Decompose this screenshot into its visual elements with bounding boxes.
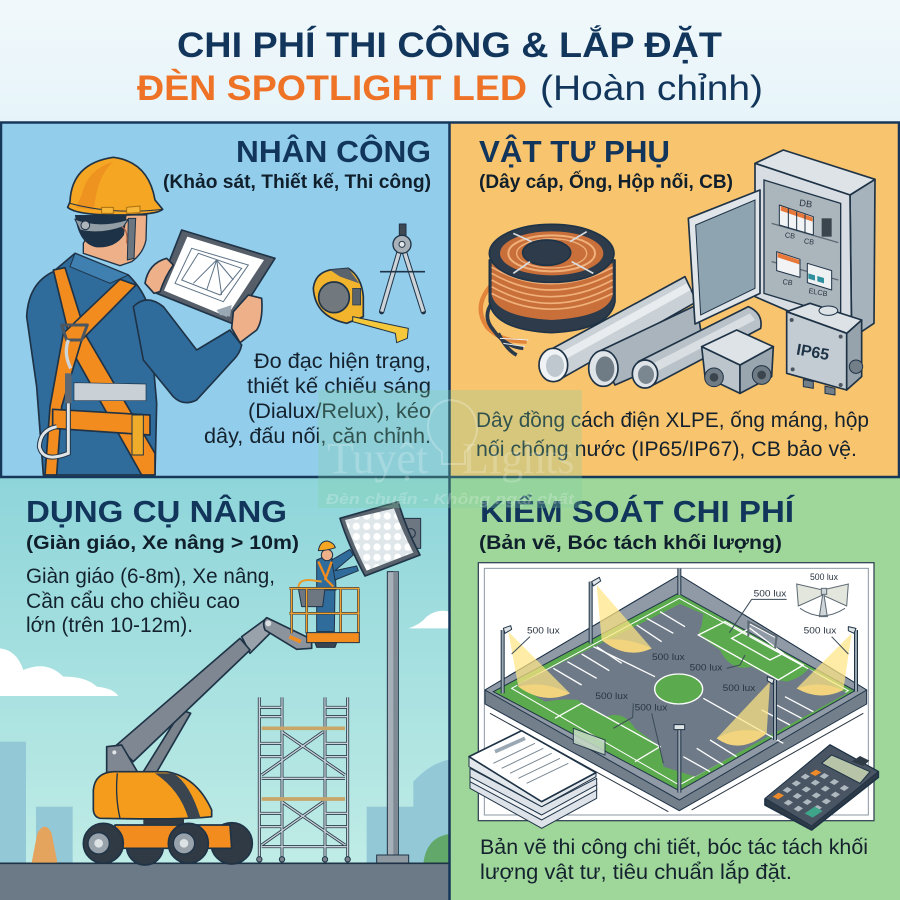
icon: rear pipes [539, 277, 703, 386]
boom lift [83, 618, 312, 865]
text block: kiểm soát chi phí: lượng vật tư, tiêu chuẩn lắp đặt. [480, 861, 792, 884]
icon: distribution board: ELCB [808, 286, 828, 298]
neck and face [83, 215, 147, 266]
text block: nhân công: dây, đấu nối, căn chỉnh. [204, 425, 431, 448]
text block: kiểm soát chi phí [480, 836, 868, 884]
text block: kiểm soát chi phí: Bản vẽ thi công chi tiết, bóc tác tách khối [480, 836, 868, 859]
icon: distribution board: CB [803, 236, 815, 247]
watermark [318, 390, 582, 508]
lux labels: 500 lux [527, 625, 560, 635]
icon: tape measure [313, 268, 363, 323]
heading: kiểm soát chi phí: KIỂM SOÁT CHI PHÍ [480, 494, 795, 529]
illustration: lighting plan [469, 563, 878, 830]
icon: small junction box [702, 330, 773, 393]
lux labels: 500 lux [754, 589, 787, 599]
subheading: dụng cụ nâng: (Giàn giáo, Xe nâng > 10m) [26, 533, 299, 554]
subheading: kiểm soát chi phí: (Bản vẽ, Bóc tách khối lượng) [479, 533, 782, 554]
light poles [503, 568, 856, 793]
heading: vật tư phụ: VẬT TƯ PHỤ [479, 133, 670, 169]
lux labels [527, 572, 838, 713]
title: CHI PHÍ THI CÔNG & LẮP ĐẶT [177, 25, 722, 65]
icon: cone [32, 827, 57, 863]
panel: nhân công [0, 122, 450, 477]
text block: dụng cụ nâng: lớn (trên 10-12m). [26, 614, 193, 637]
watermark: Đèn chuẩn - Không ngại chất [326, 491, 575, 508]
lux labels: 500 lux [810, 572, 838, 582]
panel: dụng cụ nâng [0, 478, 450, 900]
ground [0, 863, 450, 900]
icon: distribution board: CB [784, 230, 796, 241]
illustration: materials [481, 150, 875, 395]
text block: vật tư phụ: Dây đồng cách điện XLPE, ống máng, hộp [476, 409, 869, 432]
lux labels: 500 lux [635, 703, 668, 713]
helmet [68, 157, 163, 215]
title: (Hoàn chỉnh) [540, 69, 763, 108]
icon: front pipe [632, 307, 761, 388]
icon: IP65 box [787, 303, 863, 395]
panel: vật tư phụ [450, 122, 900, 477]
field plan [485, 575, 867, 812]
tablet [157, 230, 275, 324]
subheading: vật tư phụ: (Dây cáp, Ống, Hộp nối, CB) [479, 171, 733, 193]
watermark: Lights [462, 434, 574, 483]
heading: nhân công: NHÂN CÔNG [236, 133, 431, 169]
text block: vật tư phụ: nối chống nước (IP65/IP67), CB bảo vệ. [476, 438, 857, 461]
heading: dụng cụ nâng: DỤNG CỤ NÂNG [26, 493, 287, 529]
subheading: nhân công: (Khảo sát, Thiết kế, Thi công) [163, 172, 431, 193]
panel: kiểm soát chi phí [450, 478, 900, 900]
text block: vật tư phụ [476, 409, 869, 461]
illustration: boom lift and scaffold [0, 502, 450, 900]
text block: nhân công [204, 350, 431, 448]
header band [0, 0, 900, 122]
background: clouds, buildings [0, 611, 450, 863]
light beams [508, 585, 852, 746]
icon: cable reel [481, 224, 615, 355]
beam angle diagram [797, 584, 848, 617]
icon: distribution board: CB [782, 277, 793, 287]
text block: dụng cụ nâng: Cần cẩu cho chiều cao [26, 590, 240, 613]
icon: calculator [765, 745, 878, 830]
text block: dụng cụ nâng [26, 565, 275, 637]
text block: nhân công: (Dialux/Relux), kéo [248, 400, 431, 423]
lamp pole [377, 572, 409, 863]
lux labels: 500 lux [723, 683, 756, 693]
lux labels: 500 lux [804, 625, 837, 635]
title [137, 25, 763, 108]
text block: dụng cụ nâng: Giàn giáo (6-8m), Xe nâng, [26, 565, 275, 588]
text block: nhân công: Đo đạc hiện trạng, [254, 350, 431, 373]
harness [53, 268, 155, 475]
lux labels: 500 lux [690, 663, 723, 673]
asphalt [517, 604, 847, 777]
icon: compass [382, 243, 423, 312]
icon: IP65 box: IP65 [795, 342, 831, 364]
icon: LED floodlight [340, 502, 421, 576]
lux labels: 500 lux [652, 652, 685, 662]
icon: distribution board: DB [799, 198, 813, 210]
lux labels: 500 lux [595, 691, 628, 701]
icon: distribution board [688, 150, 875, 338]
icon: document stack [469, 731, 597, 828]
illustration: worker with tablet [27, 157, 425, 475]
calculator keys [783, 773, 849, 812]
scaffold [257, 697, 350, 862]
watermark: Tuyệt [327, 434, 428, 483]
blueprint sheet [478, 563, 874, 821]
arm [133, 300, 242, 403]
title: ĐÈN SPOTLIGHT LED [137, 68, 527, 108]
text block: nhân công: thiết kế chiếu sáng [247, 375, 431, 398]
worker and basket [289, 541, 359, 647]
